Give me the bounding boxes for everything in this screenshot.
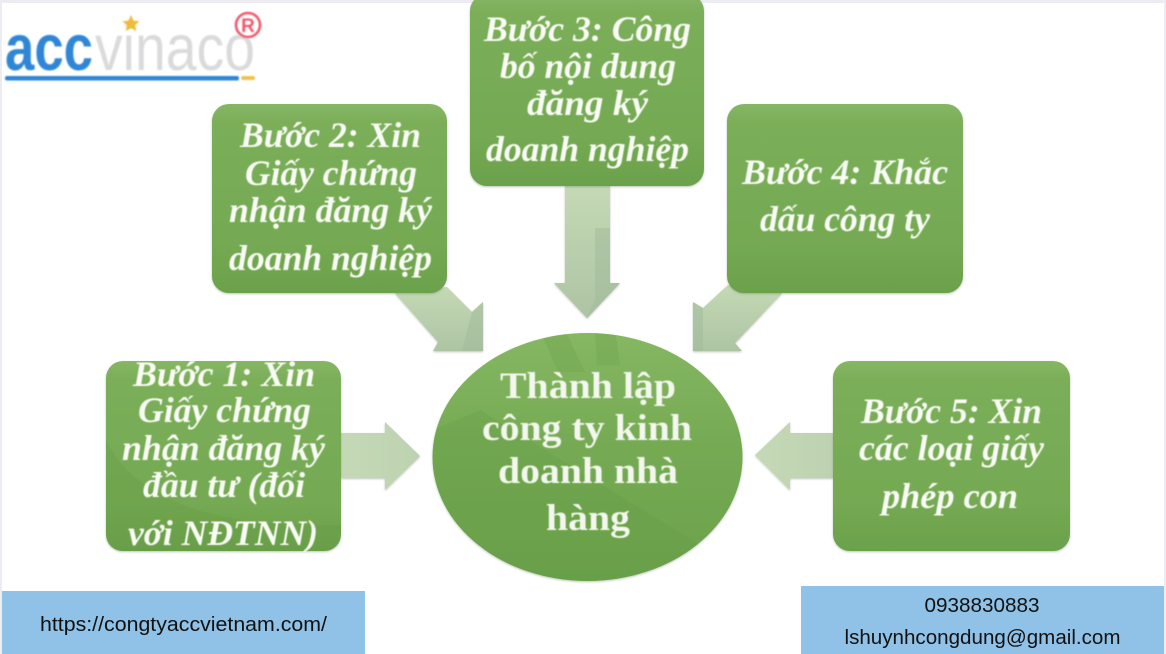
panel: step 1 <box>106 354 341 553</box>
panel: step 2 <box>212 104 447 293</box>
panel: step 3: đăng ký <box>527 83 649 123</box>
footer: website: https://congtyaccvietnam.com/ <box>40 614 327 636</box>
footer: website <box>2 591 365 654</box>
logo: ACC Vinaco: R <box>241 16 255 37</box>
footer: contact details: 0938830883 <box>924 595 1040 617</box>
logo: ACC Vinaco: vinaco <box>95 11 255 84</box>
panel: step 5: các loại giấy <box>859 428 1045 468</box>
panel: step 1: Giấy chứng <box>138 390 311 430</box>
panel: step 4: Bước 4: Khắc <box>741 152 948 192</box>
panel: step 1: đầu tư (đối <box>143 465 305 505</box>
panel: step 2: Bước 2: Xin <box>239 115 421 155</box>
panel: step 3 <box>470 0 704 186</box>
center circle: main topic: doanh nhà <box>498 451 678 492</box>
footer: contact details <box>801 586 1164 654</box>
panel: step 4 <box>727 104 963 293</box>
panel: step 5 <box>833 361 1070 551</box>
center circle: main topic: hàng <box>546 498 631 539</box>
panel: step 5: phép con <box>879 476 1018 516</box>
arrow: step 5 to center <box>755 422 833 490</box>
panel: step 2: nhận đăng ký <box>229 190 433 230</box>
panel: step 3: bố nội dung <box>500 46 676 86</box>
arrow: step 3 to center <box>554 186 620 318</box>
panel: step 3: doanh nghiệp <box>486 129 689 169</box>
panel: step 1: Bước 1: Xin <box>132 354 315 394</box>
panel: step 2: doanh nghiệp <box>229 238 432 278</box>
panel: step 1: với NĐTNN) <box>128 513 318 553</box>
panel: step 5: Bước 5: Xin <box>860 391 1042 431</box>
panel: step 2: Giấy chứng <box>245 153 417 193</box>
arrow: step 1 to center <box>341 422 420 490</box>
arrow: step 2 to center <box>395 287 483 351</box>
center circle: main topic: công ty kinh <box>482 408 692 449</box>
arrow: step 4 to center <box>693 285 782 351</box>
logo: ACC Vinaco: acc <box>5 11 93 84</box>
center circle: main topic: Thành lập <box>500 366 676 407</box>
center circle: main topic <box>432 330 742 590</box>
panel: step 4: dấu công ty <box>760 199 931 239</box>
logo: ACC Vinaco <box>5 11 260 84</box>
panel: step 3: Bước 3: Công <box>483 9 691 49</box>
footer: contact details: lshuynhcongdung@gmail.com <box>844 627 1120 649</box>
panel: step 1: nhận đăng ký <box>122 428 326 468</box>
